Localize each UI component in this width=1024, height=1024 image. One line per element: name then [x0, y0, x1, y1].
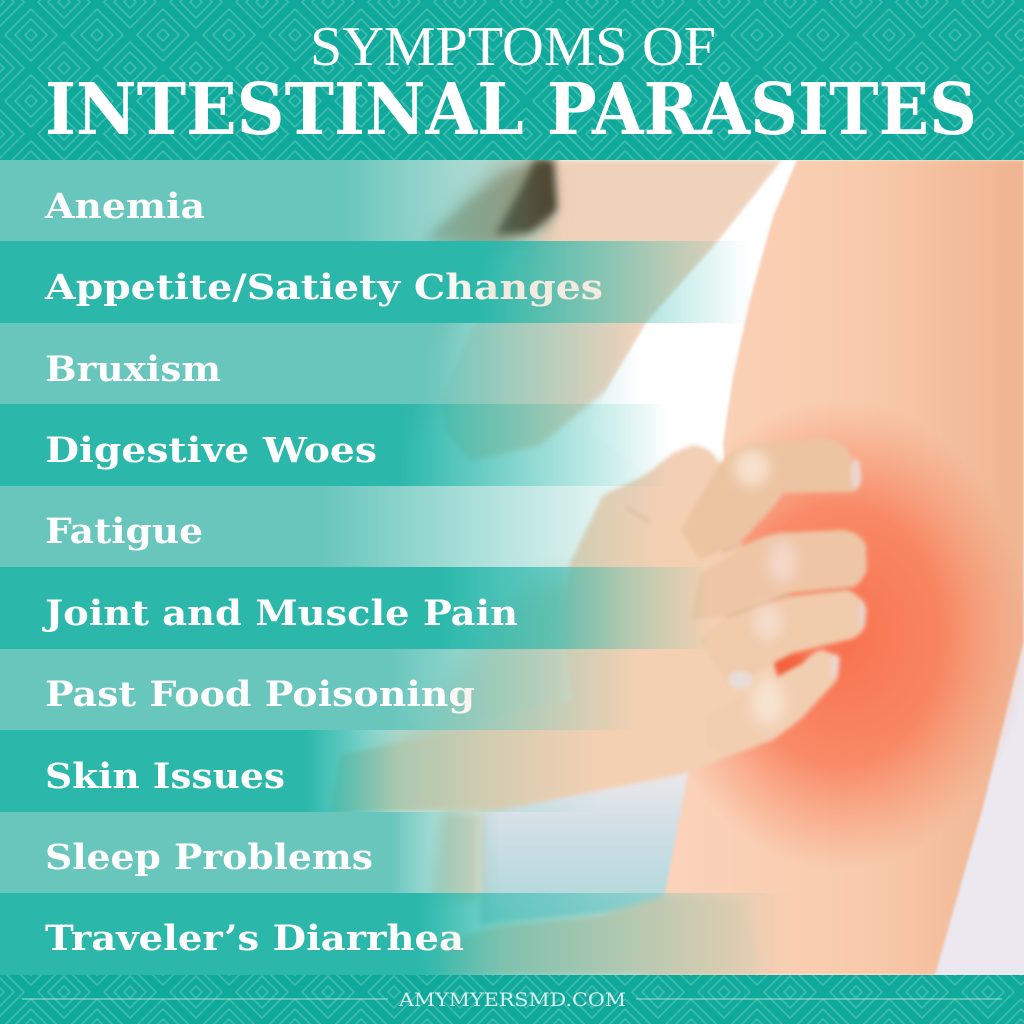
photo: pale top left backdrop [392, 160, 560, 241]
back finger [652, 444, 718, 470]
item: Digestive Woes: Digestive Woes [45, 430, 377, 471]
little finger [729, 648, 842, 756]
photo: right backdrop [900, 640, 1024, 975]
knuckle highlights [734, 450, 796, 726]
photo: pale backdrop lower [478, 770, 700, 925]
photo: tan blur behind list row [430, 810, 482, 900]
item: Past Food Poisoning: Past Food Poisoning [45, 674, 475, 715]
middle finger [690, 530, 867, 620]
photo: irritated red skin [699, 414, 1022, 856]
symptom list [42, 186, 603, 959]
finger gap shadows [627, 507, 790, 617]
photo: hair dark part [495, 160, 557, 235]
item: Skin Issues: Skin Issues [45, 756, 285, 797]
pinky underside [728, 671, 752, 689]
header band [0, 0, 1024, 160]
photo: hair light part [431, 160, 560, 242]
photo: white top [606, 161, 784, 394]
photo: hand [330, 438, 867, 812]
item: Bruxism: Bruxism [45, 349, 221, 390]
item: Appetite/Satiety Changes: Appetite/Satiety Changes [44, 267, 603, 308]
palm and wrist [330, 445, 780, 812]
photo: arm [640, 160, 1024, 975]
photo background [332, 160, 1024, 975]
item: Joint and Muscle Pain: Joint and Muscle Pain [42, 593, 518, 634]
title [45, 16, 977, 151]
list bands [0, 160, 1024, 975]
title line 2: INTESTINAL PARASITES [45, 67, 977, 151]
website: AMYMYERSMD.COM [398, 989, 626, 1011]
title line 1: SYMPTOMS OF [310, 16, 716, 78]
nails [851, 459, 861, 489]
ring finger [760, 588, 868, 664]
item: Sleep Problems: Sleep Problems [45, 837, 373, 878]
item: Fatigue: Fatigue [45, 511, 203, 552]
photo: forearm lower [420, 897, 760, 975]
photo: tan blur left of palm [371, 564, 573, 747]
photo: hair mid part [425, 160, 553, 240]
index finger [680, 438, 862, 560]
photo: neck and chest [440, 160, 783, 462]
photo: red near gap [773, 652, 806, 676]
footer band [0, 975, 1024, 1024]
item: Anemia: Anemia [44, 186, 205, 227]
item: Traveler's Diarrhea: Traveler’s Diarrhea [45, 918, 464, 959]
